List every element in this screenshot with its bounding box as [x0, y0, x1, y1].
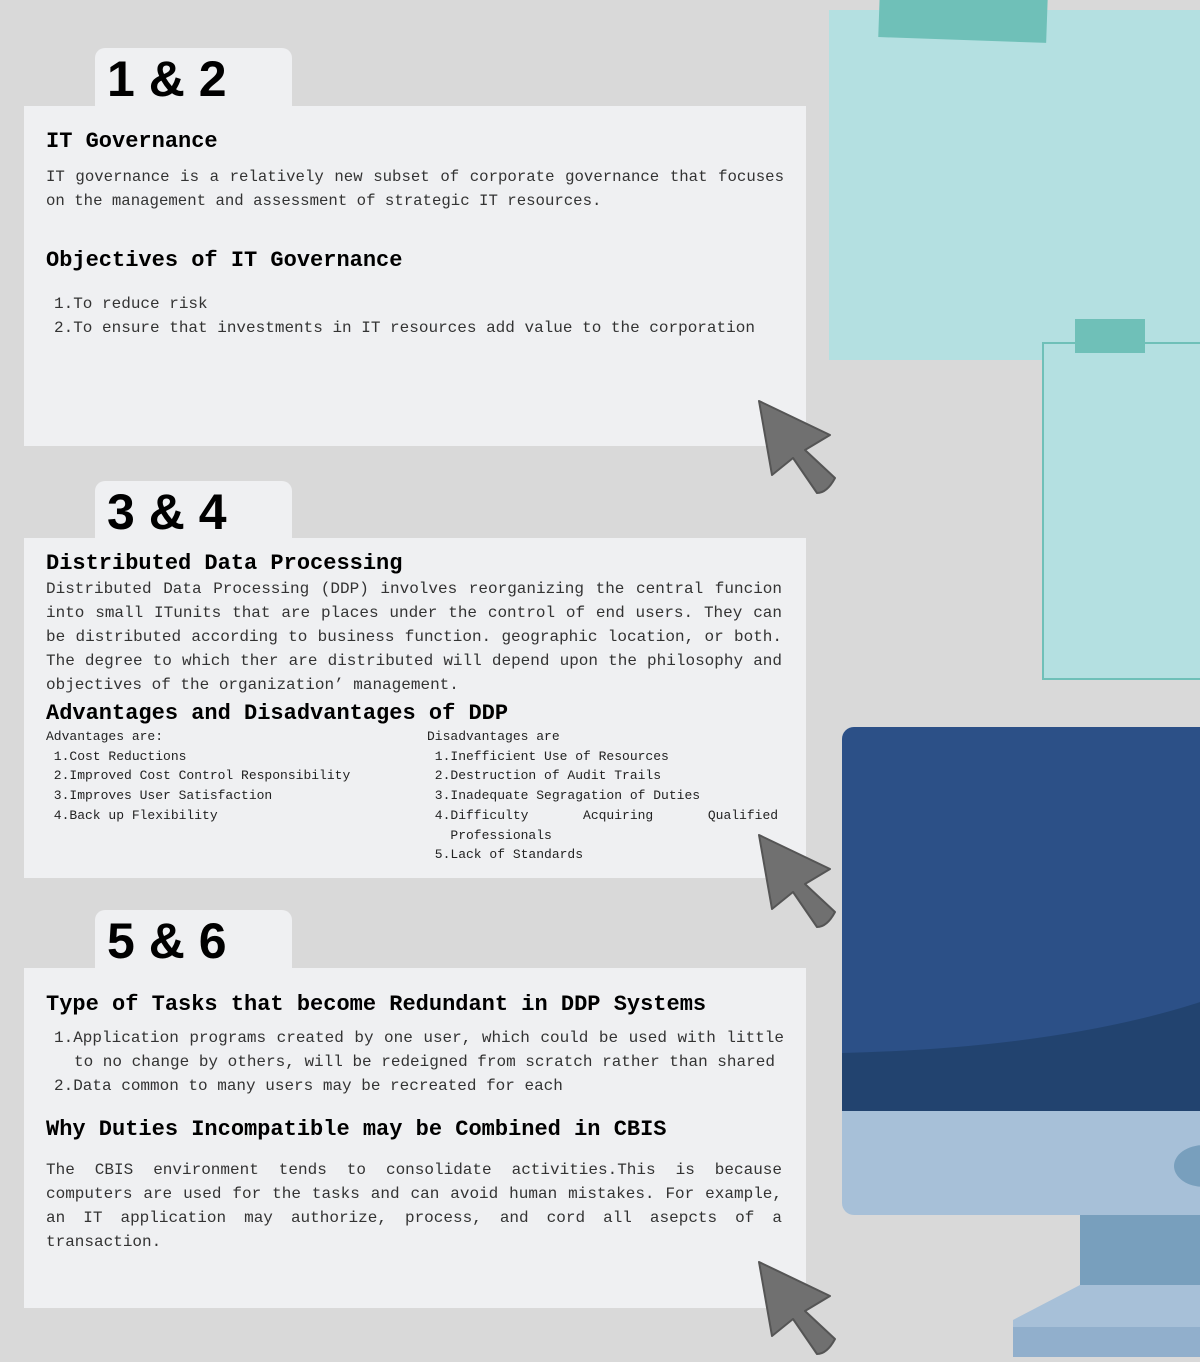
icon: cursor 3: [758, 1261, 836, 1355]
panel: redundant tasks (5 & 6): [24, 910, 806, 1308]
heading: Distributed Data Processing: Distributed Data Processing: [46, 551, 402, 576]
tab: 3 & 4: 3 & 4: [107, 484, 227, 540]
text: definition: IT governance is a relatively new subset of corporate governance that focuses on the management and assessment of strategic IT resources.: [46, 168, 784, 210]
heading: redundant tasks: Type of Tasks that become Redundant in DDP Systems: [46, 992, 706, 1017]
list: redundant tasks: [54, 1029, 784, 1095]
sticky note: large: [829, 10, 1200, 360]
tab: 1 & 2: 1 & 2: [107, 51, 227, 107]
list: advantages: Advantages are: 1.Cost Reductions 2.Improved Cost Control Responsibility 3.Improves User Satisfaction 4.Back up Flexibility: [46, 729, 350, 823]
list: redundant tasks: 1.Application programs created by one user, which could be used with little to no change by others, will be redeigned from scratch rather than shared: [54, 1029, 784, 1071]
icon: cursor 1: [758, 400, 836, 494]
text: CBIS explanation: The CBIS environment tends to consolidate activities.This is because computers are used for the tasks and can avoid human mistakes. For example, an IT application may authorize, process, and cord all asepcts of a transaction.: [46, 1161, 782, 1251]
tab: 5 & 6: 5 & 6: [107, 913, 227, 969]
sticky note: small: [1042, 342, 1200, 680]
heading: advantages and disadvantages: Advantages and Disadvantages of DDP: [46, 701, 508, 726]
text: DDP description: Distributed Data Processing (DDP) involves reorganizing the central funcion into small ITunits that are places under the control of end users. They can be distributed according to business function. geographic location, or both. The degree to which ther are distributed will depend upon the philosophy and objectives of the organization’ management.: [46, 580, 782, 694]
panel: DDP (3 & 4): [24, 481, 806, 878]
tape: small note: [1075, 319, 1145, 353]
heading: IT Governance: IT Governance: [46, 129, 218, 154]
icon: cursor 2: [758, 834, 836, 928]
list: objectives: 1.To reduce risk 2.To ensure that investments in IT resources add value to the corporation: [54, 295, 755, 337]
list: disadvantages: Disadvantages are 1.Inefficient Use of Resources 2.Destruction of Audit Trails 3.Inadequate Segragation of Duties 4.Difficulty Acquiring Qualified Professionals 5.Lack of Standards: [427, 729, 778, 862]
heading: incompatible duties: Why Duties Incompatible may be Combined in CBIS: [46, 1117, 667, 1142]
heading: objectives: Objectives of IT Governance: [46, 248, 402, 273]
tab: 5 & 6: [95, 910, 292, 970]
tape: large note: [878, 0, 1048, 43]
tab: 1 & 2: [95, 48, 292, 108]
monitor illustration: [842, 727, 1200, 1357]
tab: 3 & 4: [95, 481, 292, 541]
list: redundant tasks: 2.Data common to many users may be recreated for each: [54, 1077, 563, 1095]
panel: IT governance (1 & 2): [24, 48, 806, 446]
